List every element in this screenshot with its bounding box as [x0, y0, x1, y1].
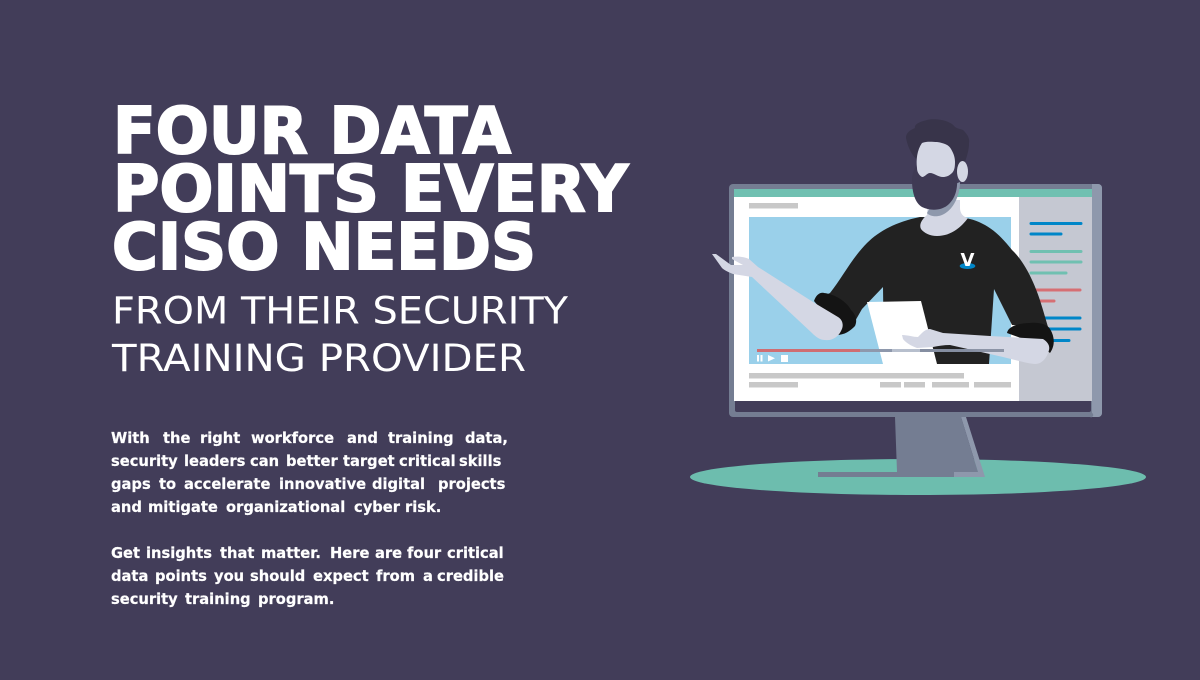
text block: insights paragraph: matter. — [261, 545, 321, 562]
text block: intro paragraph: mitigate — [148, 499, 218, 516]
text block: intro paragraph: and — [347, 430, 378, 447]
illustration: presenter on monitor — [690, 119, 1146, 495]
text block: intro paragraph: target — [343, 453, 395, 470]
left arm and hand — [712, 254, 843, 340]
right arm and hand — [902, 329, 1049, 364]
title — [112, 94, 629, 285]
text block: intro paragraph: to — [159, 476, 176, 493]
sweater — [815, 217, 1048, 364]
title: CISO NEEDS — [112, 210, 536, 285]
text block: intro paragraph: can — [250, 453, 279, 470]
beard — [912, 160, 957, 210]
video controls — [757, 355, 788, 362]
text block: insights paragraph: should — [250, 568, 305, 585]
text block: intro paragraph: right — [200, 430, 240, 447]
text block: intro paragraph: training — [388, 430, 454, 447]
text block: intro paragraph: leaders — [184, 453, 246, 470]
monitor stand — [818, 417, 985, 477]
subtitle: TRAINING PROVIDER — [111, 336, 526, 380]
progress bar over arm — [920, 349, 1004, 352]
text block: intro paragraph: With — [111, 430, 150, 447]
text block: intro paragraph: and — [111, 499, 142, 516]
text block: insights paragraph: four — [407, 545, 442, 562]
text block: insights paragraph: insights — [146, 545, 212, 562]
text block: insights paragraph: you — [214, 568, 244, 585]
text block: insights paragraph: program. — [258, 591, 334, 608]
title: POINTS EVERY — [113, 152, 629, 227]
title: FOUR DATA — [113, 94, 511, 169]
text block: intro paragraph: the — [163, 430, 190, 447]
text block: intro paragraph: critical — [399, 453, 456, 470]
text block: intro paragraph: skills — [459, 453, 502, 470]
text block: intro paragraph: innovative — [279, 476, 366, 493]
text block: insights paragraph — [111, 545, 504, 608]
text block: intro paragraph: risk. — [405, 499, 441, 516]
text block: intro paragraph: accelerate — [184, 476, 270, 493]
text block: insights paragraph: are — [375, 545, 402, 562]
text block: intro paragraph: gaps — [111, 476, 151, 493]
left cuff — [814, 293, 856, 335]
text block: insights paragraph: Here — [330, 545, 369, 562]
text block: insights paragraph: from — [376, 568, 415, 585]
text block: insights paragraph: credible — [437, 568, 504, 585]
face — [917, 142, 955, 177]
monitor frame — [729, 184, 1102, 417]
text block: insights paragraph: critical — [447, 545, 504, 562]
text block: intro paragraph — [111, 430, 508, 516]
text block: intro paragraph: digital — [372, 476, 425, 493]
text block: insights paragraph: a — [423, 568, 433, 585]
hair — [906, 119, 969, 176]
text block: insights paragraph: expect — [313, 568, 369, 585]
tablet paper — [867, 301, 937, 364]
right cuff — [1007, 323, 1054, 353]
text block: insights paragraph: points — [155, 568, 207, 585]
text block: insights paragraph: that — [220, 545, 254, 562]
video panel — [749, 217, 1011, 364]
text block: intro paragraph: security — [111, 453, 178, 470]
text block: intro paragraph: projects — [438, 476, 506, 493]
sidebar code lines — [1031, 224, 1081, 340]
ear — [957, 161, 968, 182]
text block: intro paragraph: data, — [465, 430, 508, 447]
video progress bar — [757, 349, 1004, 352]
monitor screen — [734, 189, 1092, 401]
text block: insights paragraph: Get — [111, 545, 140, 562]
subtitle: FROM THEIR SECURITY — [112, 288, 568, 332]
subtitle — [111, 288, 568, 380]
text block: intro paragraph: organizational — [226, 499, 345, 516]
text block: insights paragraph: training — [185, 591, 251, 608]
text block: intro paragraph: workforce — [251, 430, 334, 447]
sweater logo: V — [960, 250, 975, 271]
neck — [920, 200, 968, 236]
floor ellipse — [690, 459, 1146, 495]
text block: insights paragraph: security — [111, 591, 178, 608]
text block: intro paragraph: cyber — [354, 499, 401, 516]
beard shadow — [927, 182, 960, 216]
text block: intro paragraph: better — [286, 453, 338, 470]
text block: insights paragraph: data — [111, 568, 148, 585]
